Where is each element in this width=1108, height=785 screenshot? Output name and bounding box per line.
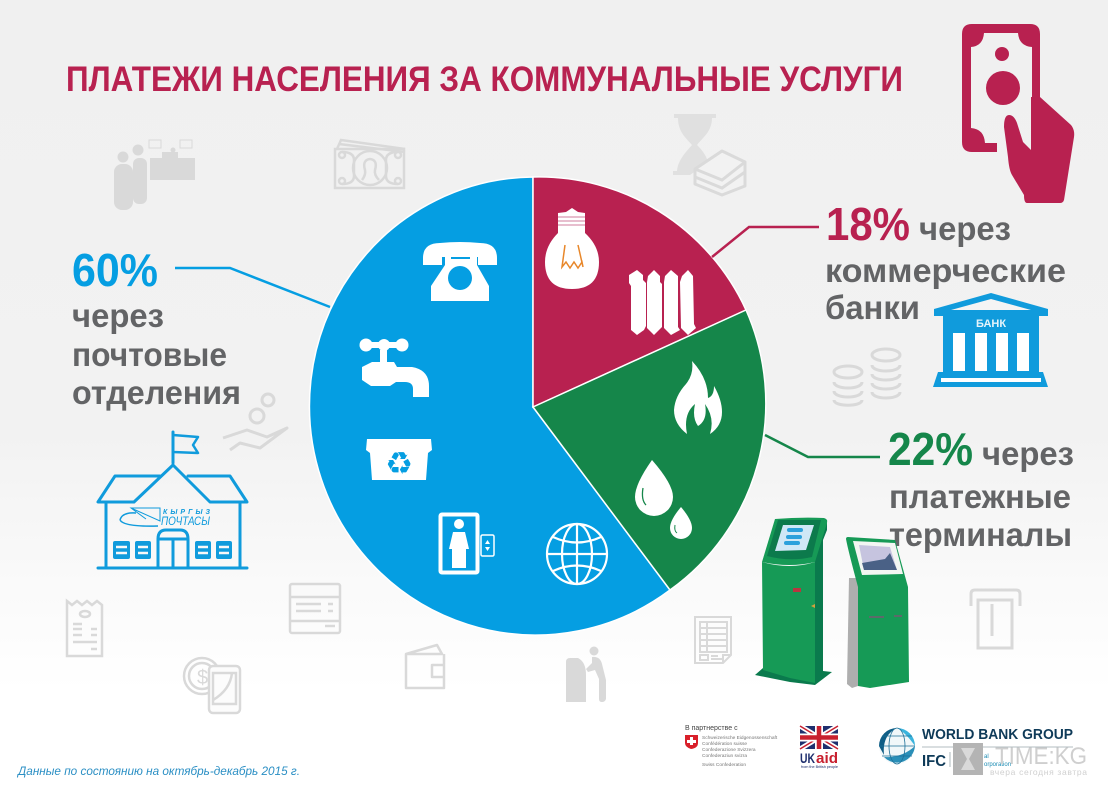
- icon: ATM card slot: [971, 590, 1020, 648]
- logo: Swiss Confederation: В партнерстве с: [685, 725, 738, 732]
- icon: person at ATM: [566, 646, 606, 702]
- logo: Swiss Confederation: [685, 725, 778, 768]
- icon: post office building: [98, 432, 247, 568]
- logo: World Bank Group IFC: IFC: [922, 753, 946, 770]
- callout: 60% via post offices: почтовые: [72, 336, 227, 373]
- logo: World Bank Group IFC: orporation: [984, 762, 1011, 768]
- icon: post office building: ПОЧТАСЫ: [161, 514, 210, 528]
- icon: light bulb: [545, 208, 599, 289]
- watermark: TIME:KG: TIME:KG: [995, 743, 1087, 770]
- icon: receipt: [67, 601, 102, 656]
- icon: water tap: [360, 338, 429, 397]
- icon: people at counter: [114, 140, 195, 210]
- icon: recycling bin: ♻: [385, 446, 413, 482]
- icon: hand with coins: [223, 394, 287, 450]
- icon: bank building: БАНК: [976, 318, 1006, 330]
- icon: globe: [547, 524, 607, 584]
- slice: post offices 60%: [309, 177, 670, 635]
- callout: 60% via post offices: 60%: [72, 244, 158, 296]
- logo: World Bank Group IFC: al: [984, 754, 989, 760]
- icon: recycling bin: [366, 439, 432, 482]
- icon: banknotes with portrait: [335, 140, 405, 188]
- slice: terminals 22%: [533, 310, 766, 590]
- slice: commercial banks 18%: [533, 177, 746, 407]
- icon: wallet: [406, 645, 444, 688]
- icon: telephone: [423, 242, 497, 301]
- icon: radiator: [629, 270, 696, 335]
- icon: elevator: [440, 514, 494, 572]
- pie chart: [309, 177, 766, 635]
- icon: bank building: [933, 293, 1048, 387]
- watermark: TIME:KG: [953, 743, 1087, 777]
- icon: payment terminal 2: [846, 537, 909, 688]
- leader line: 18%: [712, 227, 819, 257]
- icon: invoice form: [290, 584, 340, 633]
- callout: 60% via post offices: [72, 244, 241, 411]
- icon: hand holding banknote: [962, 24, 1074, 203]
- leader line: 22%: [765, 435, 880, 457]
- callout: 18% via commercial banks: через: [919, 210, 1011, 247]
- callout: 22% via payment terminals: терминалы: [889, 516, 1072, 553]
- callout: 18% via commercial banks: [825, 198, 1066, 326]
- icon: hourglass and money stack: [673, 114, 745, 195]
- leader line: 60%: [175, 268, 330, 307]
- logo: Swiss Confederation: Confederazione Svizzera: [702, 747, 756, 753]
- logo: Swiss Confederation: Swiss Confederation: [702, 762, 746, 768]
- icon: flame: [674, 361, 722, 434]
- icon: coin stacks: [834, 349, 900, 405]
- icon: coin and smartphone: [184, 658, 240, 713]
- logo: World Bank Group IFC: [879, 727, 1073, 770]
- footnote: Данные по состоянию на октябрь-декабрь 2015 г.: [16, 766, 300, 778]
- icon: post office building: КЫРГЫЗ: [163, 509, 210, 516]
- callout: 18% via commercial banks: коммерческие: [825, 252, 1066, 289]
- logo: UK aid: aid: [816, 750, 838, 767]
- logo: Swiss Confederation: Confederaziun svizra: [702, 753, 747, 759]
- icon: payment terminal 1: [755, 518, 832, 685]
- watermark: TIME:KG: вчера сегодня завтра: [990, 767, 1087, 777]
- icon: document checklist: [695, 617, 731, 663]
- callout: 22% via payment terminals: платежные: [889, 478, 1071, 515]
- callout: 22% via payment terminals: [888, 423, 1074, 553]
- callout: 18% via commercial banks: банки: [825, 289, 920, 326]
- icon: water drops: [635, 460, 692, 539]
- callout: 60% via post offices: отделения: [72, 374, 241, 411]
- logo: Swiss Confederation: Confédération suisse: [702, 741, 747, 747]
- callout: 18% via commercial banks: 18%: [826, 198, 910, 250]
- logo: Swiss Confederation: Schweizerische Eidgenossenschaft: [702, 735, 778, 741]
- logo: UK aid: from the British people: [801, 765, 838, 769]
- callout: 60% via post offices: через: [72, 297, 164, 334]
- logo: UK aid: UK: [800, 750, 815, 766]
- logo: World Bank Group IFC: WORLD BANK GROUP: [922, 727, 1073, 743]
- label: dollar sign: $: [197, 667, 208, 689]
- callout: 22% via payment terminals: 22%: [888, 423, 973, 475]
- callout: 22% via payment terminals: через: [982, 435, 1074, 472]
- logo: UK aid: [800, 726, 838, 769]
- title: ПЛАТЕЖИ НАСЕЛЕНИЯ ЗА КОММУНАЛЬНЫЕ УСЛУГИ: [66, 60, 903, 99]
